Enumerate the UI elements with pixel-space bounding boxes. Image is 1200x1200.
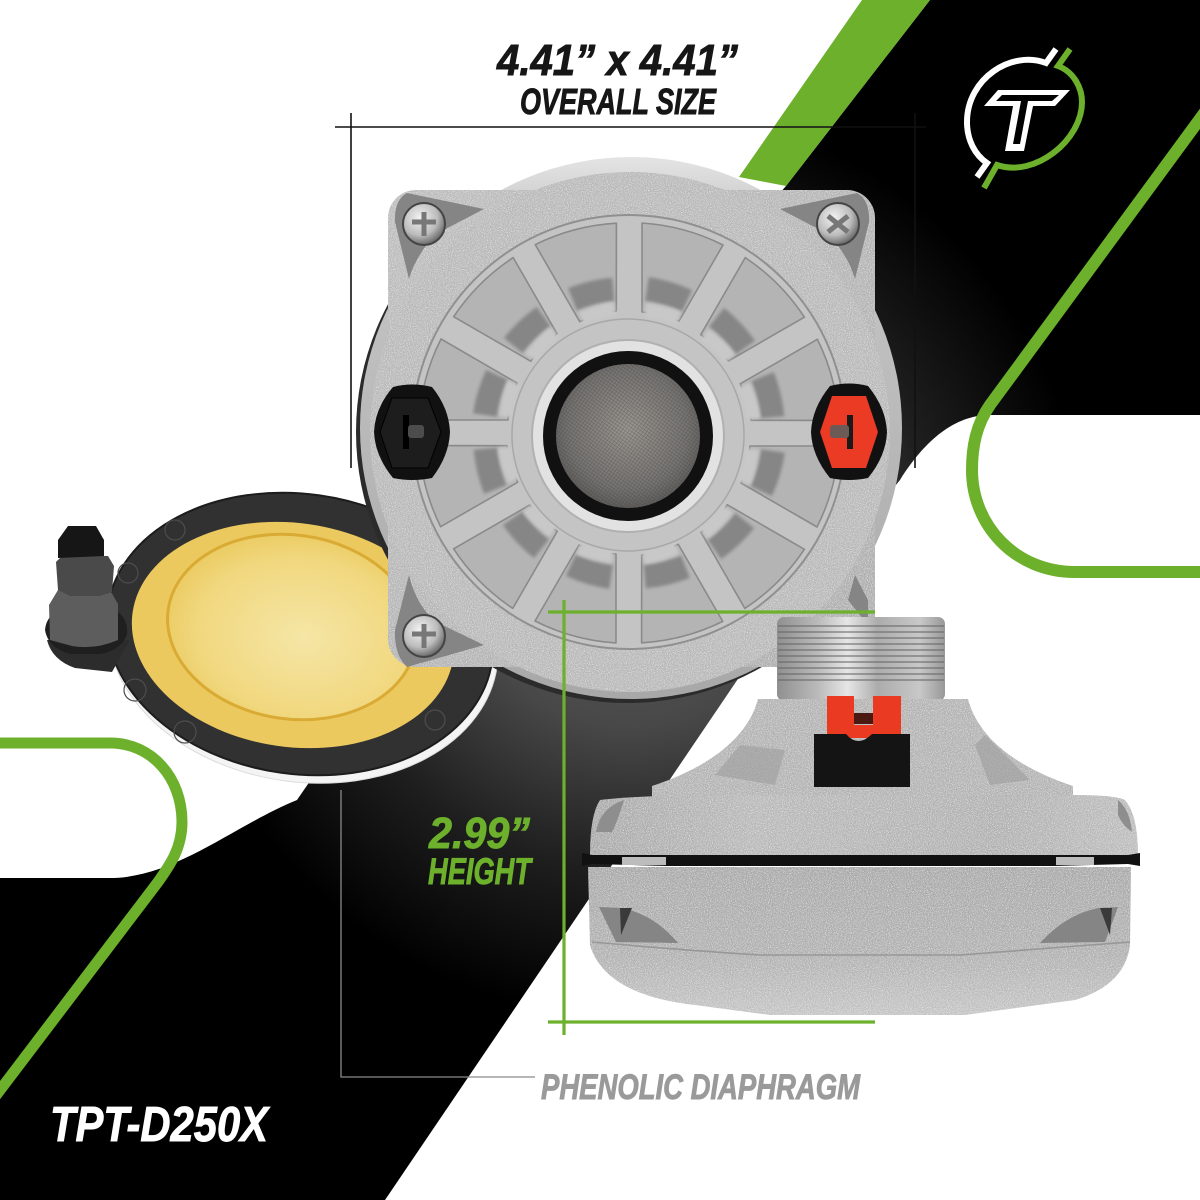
black gasket ring [543,351,713,521]
black gap [582,853,1140,866]
red terminal top [827,696,901,738]
diaphragm terminal upper post [56,556,114,596]
driver square flange [370,172,890,692]
model number: TPT-D250X [50,1098,271,1152]
height label: HEIGHT [428,851,534,892]
green diagonal band [739,0,930,186]
pocket ring outline [412,215,846,649]
screw top left [403,203,445,245]
screw top right [817,203,859,245]
driver side view [582,617,1140,1015]
logo [967,49,1082,188]
driver front view [356,157,902,703]
central hub [512,319,744,551]
black terminal side [814,734,910,787]
ear details [596,800,1132,832]
vents [599,907,678,943]
threaded neck [777,617,945,701]
upper body [590,795,1138,855]
lower rim seam [592,942,1130,955]
diaphragm yellow surround [117,502,469,768]
diaphragm dome [155,518,429,736]
dimension lines: overall size [335,113,926,468]
callout label: phenolic diaphragm: PHENOLIC DIAPHRAGM [541,1068,861,1107]
dimension lines: height [548,600,875,1035]
diaphragm black ring [88,468,512,800]
flared shoulder [652,699,1073,800]
lower body [588,867,1131,1015]
heading: overall size label: OVERALL SIZE [520,81,717,122]
diaphragm ring holes [118,520,445,743]
flange corner notches with screws [395,193,869,667]
diaphragm terminal lower post [49,590,118,647]
driver rear dark rim [356,161,898,703]
callout line: diaphragm [341,790,535,1077]
green curved line left [0,743,182,1098]
green curved line right [972,112,1200,572]
driver round housing [360,157,902,699]
diaphragm terminal head [58,526,104,558]
mesh throat [556,364,700,508]
diaphragm terminal flange [45,612,127,654]
logo T [984,90,1070,151]
red terminal [811,384,887,480]
black terminal [374,384,450,480]
screw bottom left [403,615,445,657]
logo white arc [967,49,1056,177]
logo green arc [984,49,1082,188]
height value: 2.99” [428,809,530,858]
diaphragm [45,468,517,808]
shoulder ribs [715,735,1030,785]
diaphragm terminal tab [47,640,130,672]
diaphragm white backing [89,470,517,808]
radial pockets and spokes [400,204,858,662]
heading: overall size value: 4.41” x 4.41” [496,36,738,85]
aluminium ring [532,340,724,532]
